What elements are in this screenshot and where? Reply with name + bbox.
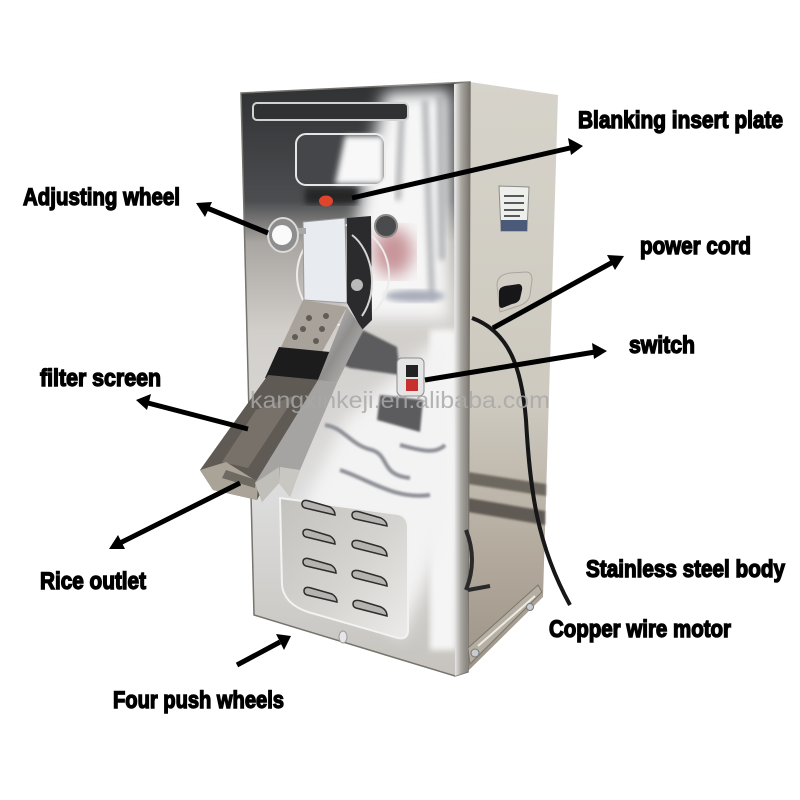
front panel reflections xyxy=(300,90,456,650)
label: power cord: power cord xyxy=(640,233,751,260)
front panel xyxy=(241,82,470,676)
power cord cable xyxy=(472,318,570,605)
label: filter screen: filter screen xyxy=(40,365,161,392)
arrow: power cord xyxy=(493,255,624,328)
arrow: adjusting wheel xyxy=(196,202,268,233)
filter screen tray xyxy=(200,347,330,500)
base rail and side wheels xyxy=(468,585,542,664)
perforated plate xyxy=(281,300,347,352)
front wheel xyxy=(339,631,347,643)
machine: stainless steel cabinet xyxy=(200,82,570,676)
label: Adjusting wheel: Adjusting wheel xyxy=(23,184,180,211)
chute side strip xyxy=(255,307,363,502)
lower louvre panel xyxy=(280,498,408,638)
arrow: rice outlet xyxy=(109,483,240,549)
rating plate xyxy=(499,186,529,231)
arrow: four push wheels xyxy=(237,634,291,665)
watermark: kangxinkeji.en.alibaba.com xyxy=(250,387,550,413)
louvre slots xyxy=(302,500,387,616)
blanking insert plate handle xyxy=(305,188,357,206)
arrow: switch xyxy=(425,343,607,380)
side handle slot xyxy=(497,272,532,312)
internal cord stub xyxy=(466,530,490,590)
window outline xyxy=(296,134,385,185)
label: Four push wheels: Four push wheels xyxy=(113,687,284,714)
top blanking slot xyxy=(253,103,408,120)
arrow: blanking insert plate xyxy=(352,138,583,198)
label: switch: switch xyxy=(629,332,695,359)
side panel xyxy=(467,82,558,672)
side panel dark reflections xyxy=(468,472,546,525)
hopper shadow behind chute xyxy=(343,330,423,432)
adjusting mechanism xyxy=(297,216,389,330)
rear knob xyxy=(375,215,397,237)
window highlight xyxy=(335,136,384,184)
corner post xyxy=(454,82,470,676)
adjusting wheel xyxy=(268,218,306,252)
arrow: filter screen xyxy=(136,394,248,429)
switch box xyxy=(397,358,424,396)
label: Copper wire motor: Copper wire motor xyxy=(549,616,731,643)
label: Rice outlet: Rice outlet xyxy=(40,568,146,595)
